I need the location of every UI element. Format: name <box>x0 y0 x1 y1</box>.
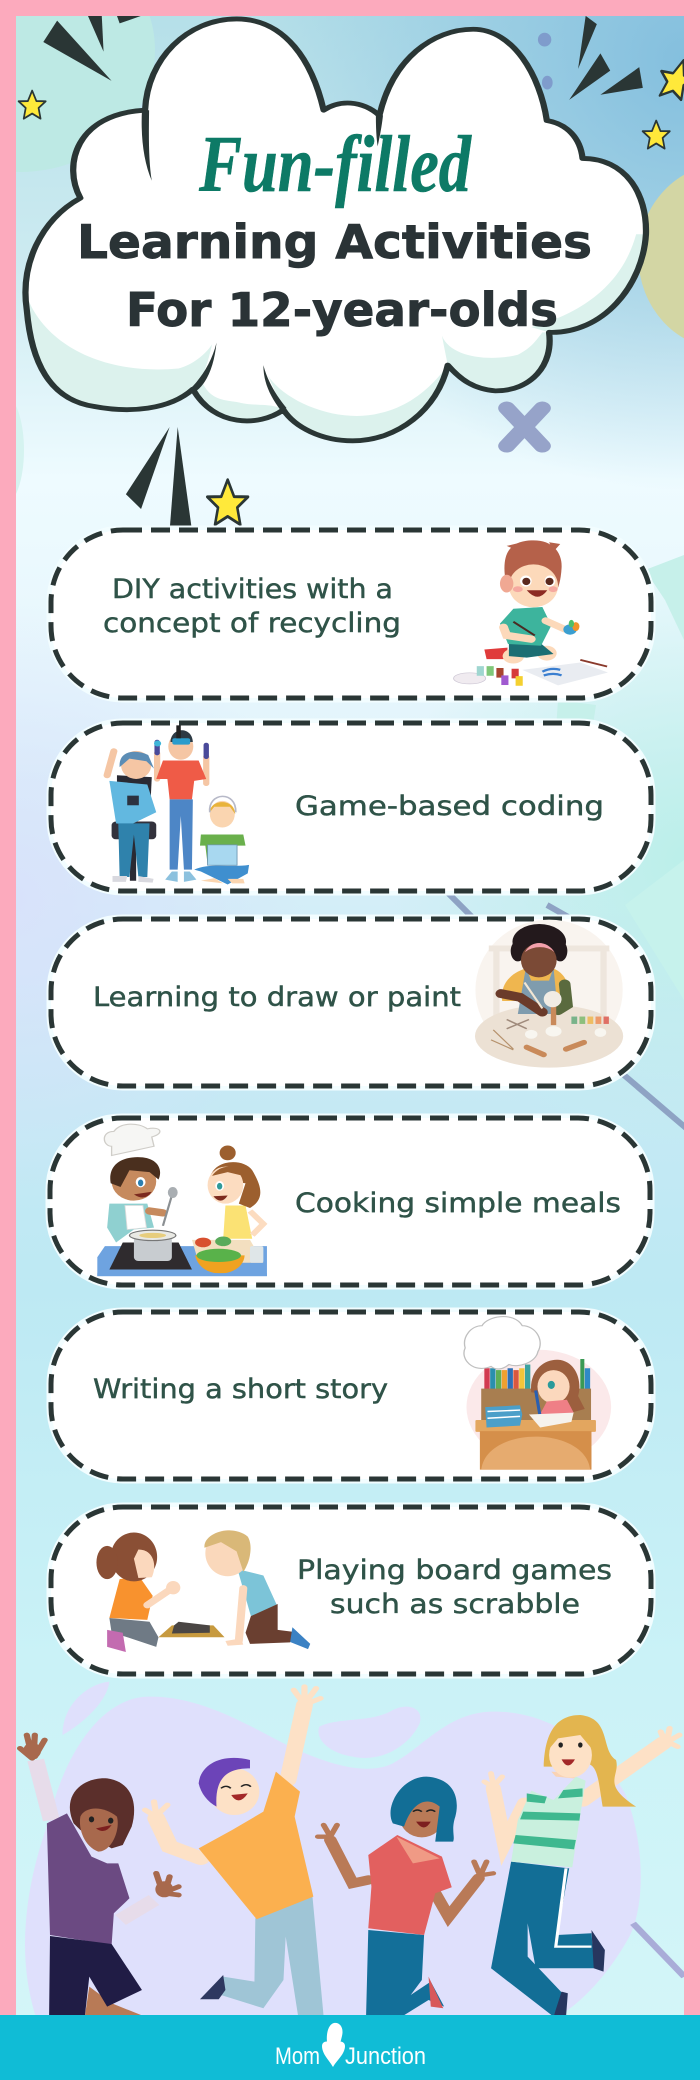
logo: MomJunction: Junction <box>345 2043 426 2070</box>
panel: DIY activities <box>51 530 651 698</box>
child 1: purple shirt <box>20 1735 179 2017</box>
panel: cooking simple meals <box>50 1118 650 1285</box>
background blobs <box>25 1682 641 2017</box>
icon: girl and boy playing chess <box>96 1530 310 1652</box>
text: Playing board games: Playing board games <box>297 1555 612 1586</box>
logo: MomJunction: Mom <box>275 2043 320 2070</box>
footer bar <box>0 2015 700 2080</box>
text: Learning to draw or paint: Learning to draw or paint <box>93 982 461 1013</box>
text: Game-based coding: Game-based coding <box>295 791 604 822</box>
icon: three kids gaming and coding <box>107 725 249 884</box>
child 3: red shirt <box>318 1777 493 2017</box>
decorative blobs: beige circle, dots and x mark <box>507 33 700 446</box>
panel: learning to draw or paint <box>51 919 651 1086</box>
title line: Learning Activities: Learning Activities <box>77 215 592 269</box>
illustration: four children jumping <box>20 1682 684 2017</box>
text: DIY activities: DIY activities with a <box>112 574 393 605</box>
title <box>77 121 592 337</box>
text: Writing a short story: Writing a short story <box>93 1374 388 1405</box>
child 4: striped top <box>484 1715 679 2017</box>
icon: boy painting with handprints <box>454 540 608 686</box>
panel: game-based coding <box>51 723 651 891</box>
text: Playing board games <box>297 1555 612 1620</box>
icon: boy and girl cooking <box>97 1124 267 1276</box>
icon: girl writing at desk with thought cloud <box>464 1317 611 1470</box>
child 2: yellow shirt <box>145 1687 324 2017</box>
title line: Fun-filled: Fun-filled <box>198 121 472 209</box>
cloud title shape <box>26 19 646 441</box>
text: Playing board games: such as scrabble <box>330 1589 580 1620</box>
icon: girl painting at a table <box>475 920 623 1068</box>
panel: writing a short story <box>51 1312 651 1479</box>
comic burst spikes and stars around the cloud <box>19 16 700 530</box>
text: Cooking simple meals: Cooking simple meals <box>295 1188 621 1219</box>
text: DIY activities <box>103 574 401 639</box>
title line: For 12-year-olds: For 12-year-olds <box>126 283 558 337</box>
logo: MomJunction <box>275 2023 426 2070</box>
text: DIY activities: concept of recycling <box>103 608 401 639</box>
panel: playing board games <box>51 1507 651 1674</box>
